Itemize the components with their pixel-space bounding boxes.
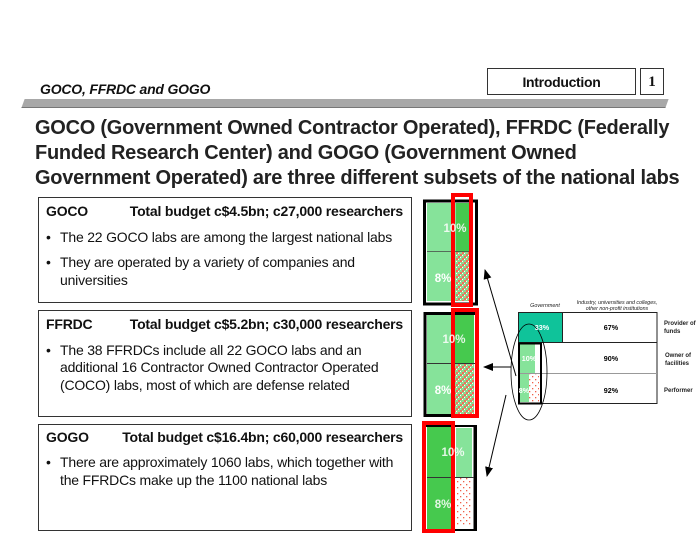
tab: Introduction [487, 68, 636, 95]
panel: FFRDC [38, 310, 412, 417]
panel: GOGO [38, 424, 412, 531]
label: 8%: 8% [435, 385, 451, 397]
row labels: Owner of [665, 353, 692, 359]
value labels: 33% [535, 323, 550, 332]
GOGO bullets [46, 454, 393, 488]
GOCO bullets: They are operated by a variety of companies and [60, 254, 355, 270]
label: 8%: 8% [435, 499, 451, 511]
title [35, 117, 679, 189]
value labels [519, 323, 619, 395]
GOGO heading: GOGO [46, 429, 89, 445]
FFRDC heading: FFRDC [46, 316, 92, 332]
tab: Introduction: Introduction [522, 74, 601, 90]
highlight: red frame [453, 195, 471, 305]
value labels: 8% [519, 386, 530, 395]
title: Government Operated) are three different subsets of the national labs [35, 167, 679, 189]
GOCO heading: GOCO [46, 203, 88, 219]
bar: GOGO [424, 423, 476, 531]
label: 8%: 8% [435, 273, 451, 285]
value labels: 90% [604, 354, 619, 363]
column header: government: Government [530, 303, 560, 309]
row labels: funds [664, 329, 681, 335]
column header: industry: Industry, universities and colleges, [577, 300, 657, 306]
GOGO bullets: There are approximately 1060 labs, which together with [60, 454, 393, 470]
header rule [21, 99, 669, 108]
arrow: to GOGO bar [487, 395, 506, 476]
page number: 1 [648, 74, 656, 90]
row labels: Performer [664, 388, 693, 394]
panel: GOCO [38, 197, 412, 303]
bar: GOCO [424, 195, 476, 305]
GOCO bullets: • [46, 229, 51, 245]
label: 10%: 10% [442, 334, 466, 346]
label: 10%: 10% [441, 447, 465, 459]
column header: industry: other non-profit institutions [586, 306, 649, 312]
value labels: 10% [522, 354, 537, 363]
GOCO bullets: • [46, 254, 51, 270]
label: 10%: 10% [443, 223, 467, 235]
row labels [664, 321, 697, 394]
GOCO bullets: The 22 GOCO labs are among the largest national labs [60, 229, 392, 245]
FFRDC bullets: additional 16 Contractor Owned Contractor Operated [60, 359, 378, 375]
source chart [511, 300, 697, 420]
highlight: red frame [453, 310, 477, 416]
row labels: Provider of [664, 321, 697, 327]
FFRDC bullets: (COCO) labs, most of which are defense related [60, 377, 350, 393]
column header: industry [577, 300, 657, 312]
arrow: to FFRDC bar [484, 366, 511, 368]
FFRDC bullets: The 38 FFRDCs include all 22 GOCO labs and an [60, 342, 361, 358]
arrow: to GOCO bar [485, 270, 516, 376]
GOCO budget: Total budget c$4.5bn; c27,000 researchers [130, 203, 403, 219]
FFRDC bullets [46, 342, 378, 393]
value labels: 92% [604, 386, 619, 395]
GOGO budget: Total budget c$16.4bn; c60,000 researchers [122, 429, 403, 445]
title: GOCO (Government Owned Contractor Operated), FFRDC (Federally [35, 117, 669, 139]
GOCO bullets [46, 229, 392, 288]
bar: FFRDC [425, 310, 477, 416]
GOCO bullets: universities [60, 272, 128, 288]
row labels: facilities [665, 361, 690, 367]
page number [640, 68, 664, 95]
section heading: GOCO, FFRDC and GOGO [40, 81, 210, 97]
FFRDC bullets: • [46, 342, 51, 358]
highlight: red frame [424, 423, 453, 531]
FFRDC budget: Total budget c$5.2bn; c30,000 researchers [130, 316, 403, 332]
title: Funded Research Center) and GOGO (Government Owned [35, 142, 577, 164]
GOGO bullets: the FFRDCs make up the 1100 national labs [60, 472, 327, 488]
value labels: 67% [604, 323, 619, 332]
GOGO bullets: • [46, 454, 51, 470]
